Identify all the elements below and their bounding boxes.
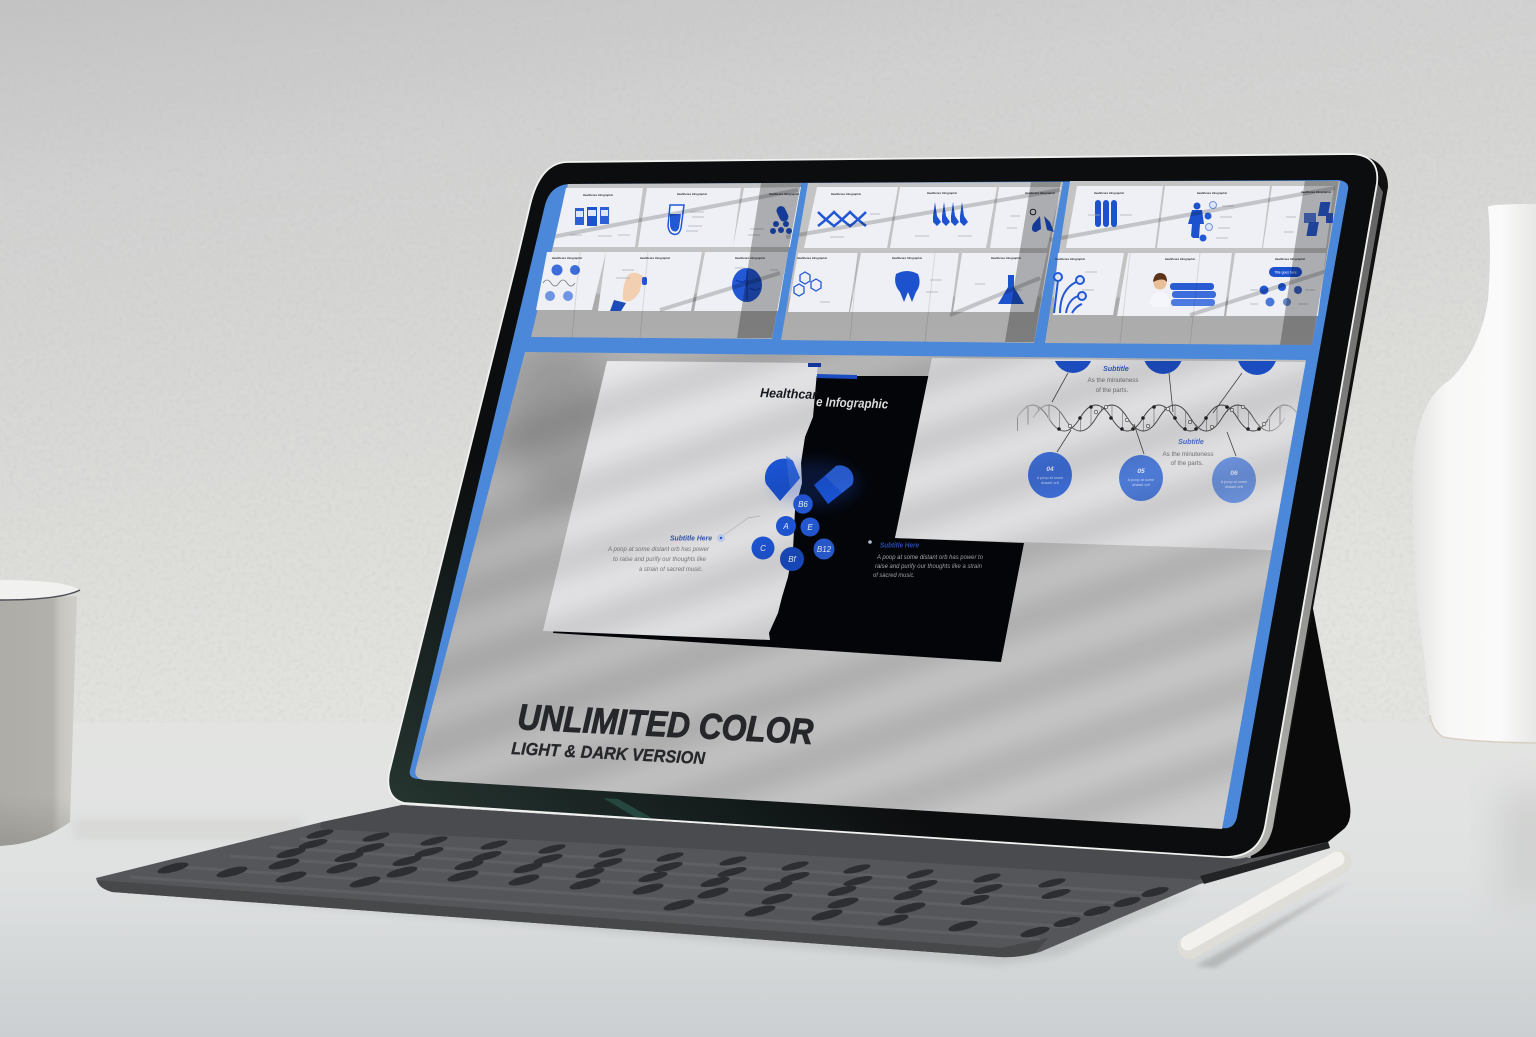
tablet silver side <box>1223 183 1383 859</box>
panel 3 titles: Healthcare Infographic <box>1094 191 1125 195</box>
lower subtitle <box>1163 439 1213 467</box>
panel 1 thumbnails <box>536 187 801 311</box>
vitamin A: A <box>782 522 789 531</box>
hinge dark clasp <box>1200 842 1330 884</box>
coffee mug <box>0 580 80 846</box>
main panel background <box>400 345 1320 835</box>
panel 3 titles: Healthcare Infographic <box>1165 257 1196 261</box>
circle 05: 05 <box>1137 468 1145 475</box>
vitamin C: C <box>760 544 766 553</box>
preview panel 3 <box>1045 181 1340 345</box>
mug shadow on table <box>72 818 302 840</box>
right body text <box>873 554 983 577</box>
panel 3 titles: Healthcare Infographic <box>1055 257 1086 261</box>
icon: three columns <box>575 207 609 226</box>
top subtitle: As the minuteness <box>1088 377 1138 384</box>
icon: four circles with strand <box>543 264 580 301</box>
icon: branching tree <box>1054 273 1086 313</box>
circle 05 <box>1119 455 1163 501</box>
circle 04: A poop at some <box>1037 476 1063 480</box>
circle 05: distant orb <box>1132 483 1150 487</box>
tablet bezel <box>388 154 1377 857</box>
main presentation panel <box>415 352 1306 829</box>
stylus pencil <box>1188 859 1352 968</box>
top subtitle <box>1088 366 1138 394</box>
panel 1 titles: Healthcare Infographic <box>640 256 671 260</box>
circle 06: A poop at some <box>1221 480 1247 484</box>
keyboard front edge <box>97 880 1048 957</box>
slide title: Healthcar <box>760 385 818 402</box>
icon: hexagons <box>794 272 821 296</box>
vase <box>1413 204 1536 743</box>
panel 1 background <box>531 183 801 339</box>
slide title <box>760 388 888 410</box>
icon: brain <box>732 268 762 302</box>
left subtitle: Subtitle Here <box>670 534 712 542</box>
left callout <box>607 516 760 573</box>
tablet rear edge <box>1223 154 1388 859</box>
lower subtitle: of the parts. <box>1171 460 1204 467</box>
right capsule half <box>814 465 853 504</box>
dna strands <box>1016 404 1297 432</box>
icon: human figure <box>1188 202 1216 242</box>
vitamin circles <box>752 494 834 571</box>
slide top bars <box>808 363 857 379</box>
panel 1 titles: Healthcare Infographic <box>552 256 583 260</box>
panel 1 titles: Healthcare Infographic <box>677 192 708 196</box>
dna slide content <box>1016 361 1297 503</box>
keys <box>157 827 1170 940</box>
icon: syringes <box>933 202 968 226</box>
lower subtitle: Subtitle <box>1178 439 1204 446</box>
right body text: of sacred music. <box>873 572 915 579</box>
preview panel 2 <box>781 182 1063 343</box>
panel 2 titles: Healthcare Infographic <box>797 256 828 260</box>
circle 06: distant orb <box>1225 485 1243 489</box>
left body text: A poop at some distant orb has power <box>607 546 710 553</box>
panel 3 titles: Healthcare Infographic <box>1301 190 1332 194</box>
circle 06: 06 <box>1230 470 1238 477</box>
right body text: A poop at some distant orb has power to <box>876 554 983 561</box>
panel 2 titles: Healthcare Infographic <box>991 256 1022 260</box>
right dot <box>868 540 872 544</box>
icon: lungs <box>1030 209 1054 232</box>
wall background <box>0 0 1536 724</box>
panel 3 titles <box>1055 190 1332 261</box>
headline: UNLIMITED COLOR <box>517 696 814 752</box>
panel 2 titles: Healthcare Infographic <box>831 192 862 196</box>
left body text: to raise and purify our thoughts like <box>613 556 706 563</box>
top left shade <box>498 352 608 504</box>
panel 2 titles <box>797 191 1056 260</box>
panel 3 background <box>1045 181 1340 345</box>
preview panel 1 <box>531 183 801 339</box>
vitamin B6: B6 <box>798 500 808 509</box>
grey caption lines in thumbnails <box>570 206 1315 304</box>
left capsule half <box>765 459 800 501</box>
right callout <box>868 540 983 579</box>
panel 2 background <box>781 182 1063 343</box>
icon: tooth <box>895 271 920 302</box>
icon: medical cross <box>1304 202 1333 236</box>
slide title: e Infographic <box>816 394 889 412</box>
icon: flask <box>998 275 1024 304</box>
icon: pills and dots <box>770 205 792 234</box>
vitamin E: E <box>807 523 813 532</box>
left body text: a strain of sacred music. <box>639 566 703 573</box>
icon: test tube <box>668 205 684 234</box>
capsule glow <box>771 462 859 506</box>
screen blue background <box>410 180 1348 828</box>
top subtitle: of the parts. <box>1096 387 1129 394</box>
panel 2 titles: Healthcare Infographic <box>892 256 923 260</box>
keyboard stand behind tablet <box>1250 598 1350 860</box>
icon: oxygen cylinders <box>1095 200 1117 227</box>
icon: pill label with nodes <box>1260 267 1302 306</box>
circle 05: A poop at some <box>1128 478 1154 482</box>
icon: doctor with stack <box>1150 273 1216 307</box>
bezel teal highlight <box>603 798 652 818</box>
tablet <box>388 153 1388 859</box>
panel shadows <box>552 180 1339 345</box>
window light shadow stripes <box>416 354 1305 822</box>
circle 06 <box>1212 457 1256 503</box>
panel 1 titles: Healthcare Infographic <box>769 192 800 196</box>
panel 1 titles: Healthcare Infographic <box>583 193 614 197</box>
keyboard body <box>96 805 1330 957</box>
left body text <box>607 546 710 573</box>
lower subtitle: As the minuteness <box>1163 451 1213 458</box>
light slide <box>543 361 818 640</box>
panel 3 titles: Healthcare Infographic <box>1197 191 1228 195</box>
top blue circles <box>1055 361 1276 375</box>
leader lines <box>1052 373 1242 456</box>
panel 3 titles: Healthcare Infographic <box>1275 257 1306 261</box>
panel 1 titles: Healthcare Infographic <box>735 256 766 260</box>
left dot <box>717 534 725 542</box>
panel 2 titles: Healthcare Infographic <box>927 191 958 195</box>
table surface <box>0 723 1536 1037</box>
icon: dna chain <box>818 212 866 226</box>
right subtitle: Subtitle Here <box>880 540 919 550</box>
panel 2 thumbnails <box>788 187 1061 312</box>
keyboard <box>96 805 1330 965</box>
vitamin B1: Bf <box>788 555 797 564</box>
table shadow at right <box>1500 790 1536 900</box>
icon: hand and sleeve <box>610 273 647 311</box>
top subtitle: Subtitle <box>1103 366 1129 373</box>
subheading: LIGHT & DARK VERSION <box>511 738 706 768</box>
keyboard hinge <box>320 805 1253 880</box>
icon: split capsule <box>765 456 859 506</box>
panel 1 titles <box>552 192 800 260</box>
left leader line <box>724 516 760 535</box>
circle 04: distant orb <box>1041 481 1059 485</box>
right slide <box>895 358 1306 550</box>
keyboard ribs <box>130 839 1160 939</box>
panel 2 titles: Healthcare Infographic <box>1025 191 1056 195</box>
dark slide <box>553 376 1024 662</box>
right body text: raise and purify our thoughts like a strain <box>875 563 982 570</box>
keyboard shadow <box>100 888 1200 965</box>
panel 3 thumbnails <box>1053 186 1334 316</box>
circle 04: 04 <box>1046 466 1054 473</box>
vitamin B12: B12 <box>817 545 832 554</box>
icon: pill label with nodes: Title goes here <box>1274 270 1297 274</box>
circle 04 <box>1028 452 1072 498</box>
